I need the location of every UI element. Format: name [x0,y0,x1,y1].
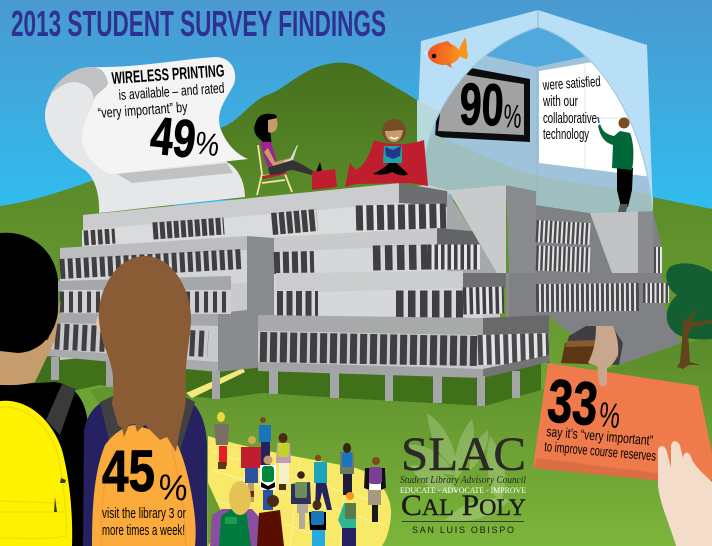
building: lower left sill [37,348,218,372]
text: collaborative technology: were satisfied [542,74,601,94]
left student: neck [0,300,61,385]
student: teal shirt [314,455,332,510]
red cushion [345,140,428,187]
building: lower left wall [37,323,218,371]
card folded strip [533,458,712,483]
text: wireless printing: % [193,124,222,163]
right student: straps [100,395,195,450]
hand at lower right [658,441,712,546]
text: 33 percent stat: to improve course reserves [544,438,657,464]
logo location: SAN LUIS OBISPO [412,525,514,535]
text: wireless printing: WIRELESS PRINTING [111,61,225,88]
building: right wing band two side [463,273,509,288]
90 percent stat: 90 [459,71,505,139]
building: right wing band one side [437,228,482,245]
trousers [268,160,315,175]
face [268,118,278,133]
building: right wing band two [276,271,463,292]
text: 45 percent stat: visit the library 3 or [102,505,186,522]
green hills and ground [0,178,712,546]
red ottoman [312,169,337,190]
building: third level left band [60,236,247,262]
building: right wing wall [274,232,482,320]
building: lower left band [50,313,218,326]
shaded lawn under building [28,350,541,406]
face [385,130,403,142]
building: lower right band [258,315,483,335]
student: black top blue bag [309,500,326,546]
building: lower left windows [46,336,208,344]
text: wireless printing: “very important” by [97,100,189,122]
logo council name: Student Library Advisory Council [400,474,526,486]
building: right dark mass [509,205,681,365]
scroll: back sheet [45,67,245,213]
glass: arch outline [424,27,651,197]
text: wireless printing [97,61,225,170]
building: second level wall [82,203,446,250]
right student: ear [96,316,101,332]
right student: navy jacket [83,397,207,546]
left student: hair [0,233,58,353]
card [533,363,712,483]
crowd of students on walkway [210,412,386,546]
figure: man writing at whiteboard [598,117,633,212]
left student: strap [46,384,76,435]
text: 33 percent stat: 33 [545,366,601,438]
scroll: curl shadow [50,67,107,107]
display screen frame [435,60,530,142]
text: 45 percent stat: 45 [102,439,155,504]
logo Cal Poly wordmark: CAL POLY [401,489,526,522]
building: right tower side [638,211,653,273]
scroll: front sheet [82,57,248,174]
tree trunk and roots [677,306,712,369]
building: central tower front [448,185,506,273]
building: right wing band one [274,228,437,252]
chair [257,145,292,195]
student: maroon shirt [257,495,284,546]
building: archway opening [561,326,623,365]
building: lower right sill [258,362,483,378]
building: centre shaft [218,236,274,372]
building: lower right windows [260,347,549,351]
building: pale rear mass [60,183,500,360]
orange course reserves card [533,326,712,483]
dark mountain [220,63,520,200]
building: top slab [83,183,399,230]
logo SLAC wordmark: SLAC [401,428,526,481]
building: tower shadow wedge [447,191,500,275]
figure: woman with laptop on chair [254,114,337,195]
left student: shirt [0,382,88,546]
teal shirt [383,146,402,163]
SLAC logo [400,413,526,535]
text: 45 percent stat: % [158,466,189,509]
glass: outer shell [417,10,653,213]
student: purple backpack [364,457,386,522]
whiteboard with grid [539,62,647,176]
student: red shirt [241,436,261,502]
student: orange hair teal top [338,492,356,546]
building: lower right band side [483,315,549,335]
text: 33 percent stat [544,366,657,464]
tree canopy [666,263,712,339]
yellow walkway [208,436,391,546]
scroll: under-shadow [117,163,233,183]
figure: girl reading on red cushion [345,119,428,187]
laptop [284,145,298,162]
student: grey-green with blue bag [340,443,354,495]
icon: goldfish [424,37,468,68]
logo rule [402,521,524,522]
text: 45 percent stat: more times a week! [102,522,185,539]
crossed legs [373,163,408,175]
building [37,183,681,406]
paper scroll [45,57,248,213]
building: top slab side [399,183,447,207]
logo leaves [408,413,510,521]
building: second level windows [84,216,446,238]
distant footpath [186,368,245,398]
student: green backpack [260,456,276,510]
building: lower right sill side [483,355,549,378]
90 percent stat: % [503,97,523,135]
text: wireless printing: is available – and rated [118,81,225,104]
student: blue shirt [259,417,271,468]
building: pillars [51,357,520,406]
building: right wing windows two [277,300,504,304]
title: 2013 STUDENT SURVEY FINDINGS [11,3,386,44]
student: navy jacket [291,471,311,529]
student: yellow bag [276,433,291,490]
building: fourth level left wall [62,290,231,314]
student: blonde purple shirt green bag [210,481,262,546]
hand holding card [588,326,618,386]
text: collaborative technology [542,74,601,143]
top [260,142,277,172]
smile [390,137,398,138]
hair [254,114,278,150]
display screen [438,70,524,135]
right student: hair [99,256,191,452]
text: collaborative technology: with our [542,94,578,110]
building: third level left windows [60,259,243,269]
building: right tower windows [536,231,669,298]
text: wireless printing: 49 [148,106,199,170]
left student [0,233,88,546]
shoe [316,162,322,175]
building: central tower side [506,185,536,320]
book [385,146,401,159]
sky background [0,0,712,230]
glass: shell over hills [417,100,653,213]
building: lower right wall [258,331,549,372]
text: 33 percent stat: % [597,395,622,436]
logo tagline: EDUCATE - ADVOCATE - IMPROVE [400,486,526,495]
text: collaborative technology: technology [543,127,589,143]
building: third level left wall [60,250,247,290]
glass: interior through arch [426,28,653,213]
building: right tower light face [590,211,638,273]
building: fourth level left windows [60,292,228,312]
building: right wing windows one [274,257,480,263]
left student: yellow backpack [0,401,72,546]
right student: orange backpack [92,425,196,546]
text: collaborative technology: collaborative [543,111,597,127]
tree [666,263,712,369]
text: 45 percent stat [102,439,189,539]
student: blonde grey top [214,412,229,469]
building: fourth level left band [58,276,231,291]
glass atrium [417,10,660,220]
right student [83,256,207,546]
glass: centre seam [537,10,538,205]
text: 33 percent stat: say it’s “very important” [546,423,654,448]
hair [382,119,406,143]
front lawn [90,338,712,546]
